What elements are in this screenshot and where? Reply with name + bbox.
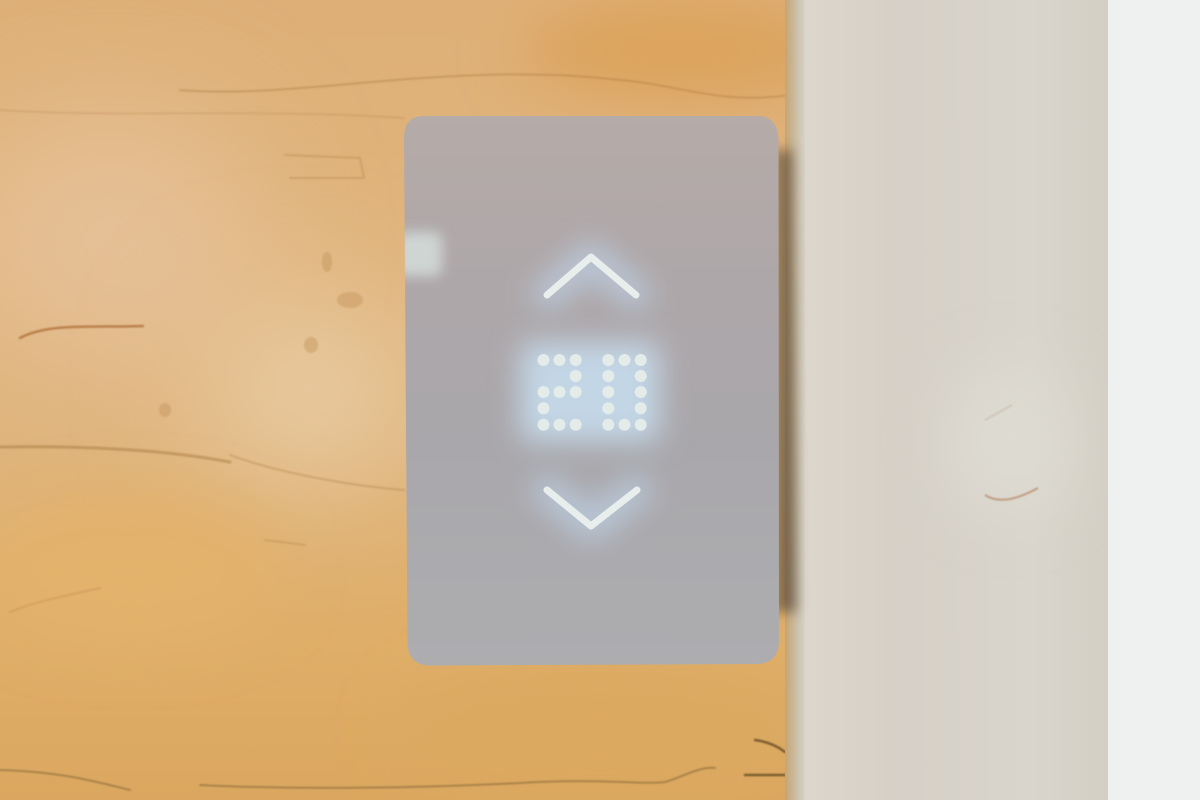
wall cracks [0,74,790,790]
down arrow [547,490,637,526]
bright background beyond pillar [1108,0,1200,800]
digit 2 [538,354,582,431]
up arrow [547,257,636,295]
digit 0 [602,354,647,431]
wall pits [159,252,363,417]
temperature display: 20 [520,342,660,442]
thermostat body [396,116,779,666]
glass reflection [396,232,442,276]
cast shadow of thermostat [776,150,796,612]
plaster wall [0,0,840,800]
wall pillar [785,0,1108,800]
